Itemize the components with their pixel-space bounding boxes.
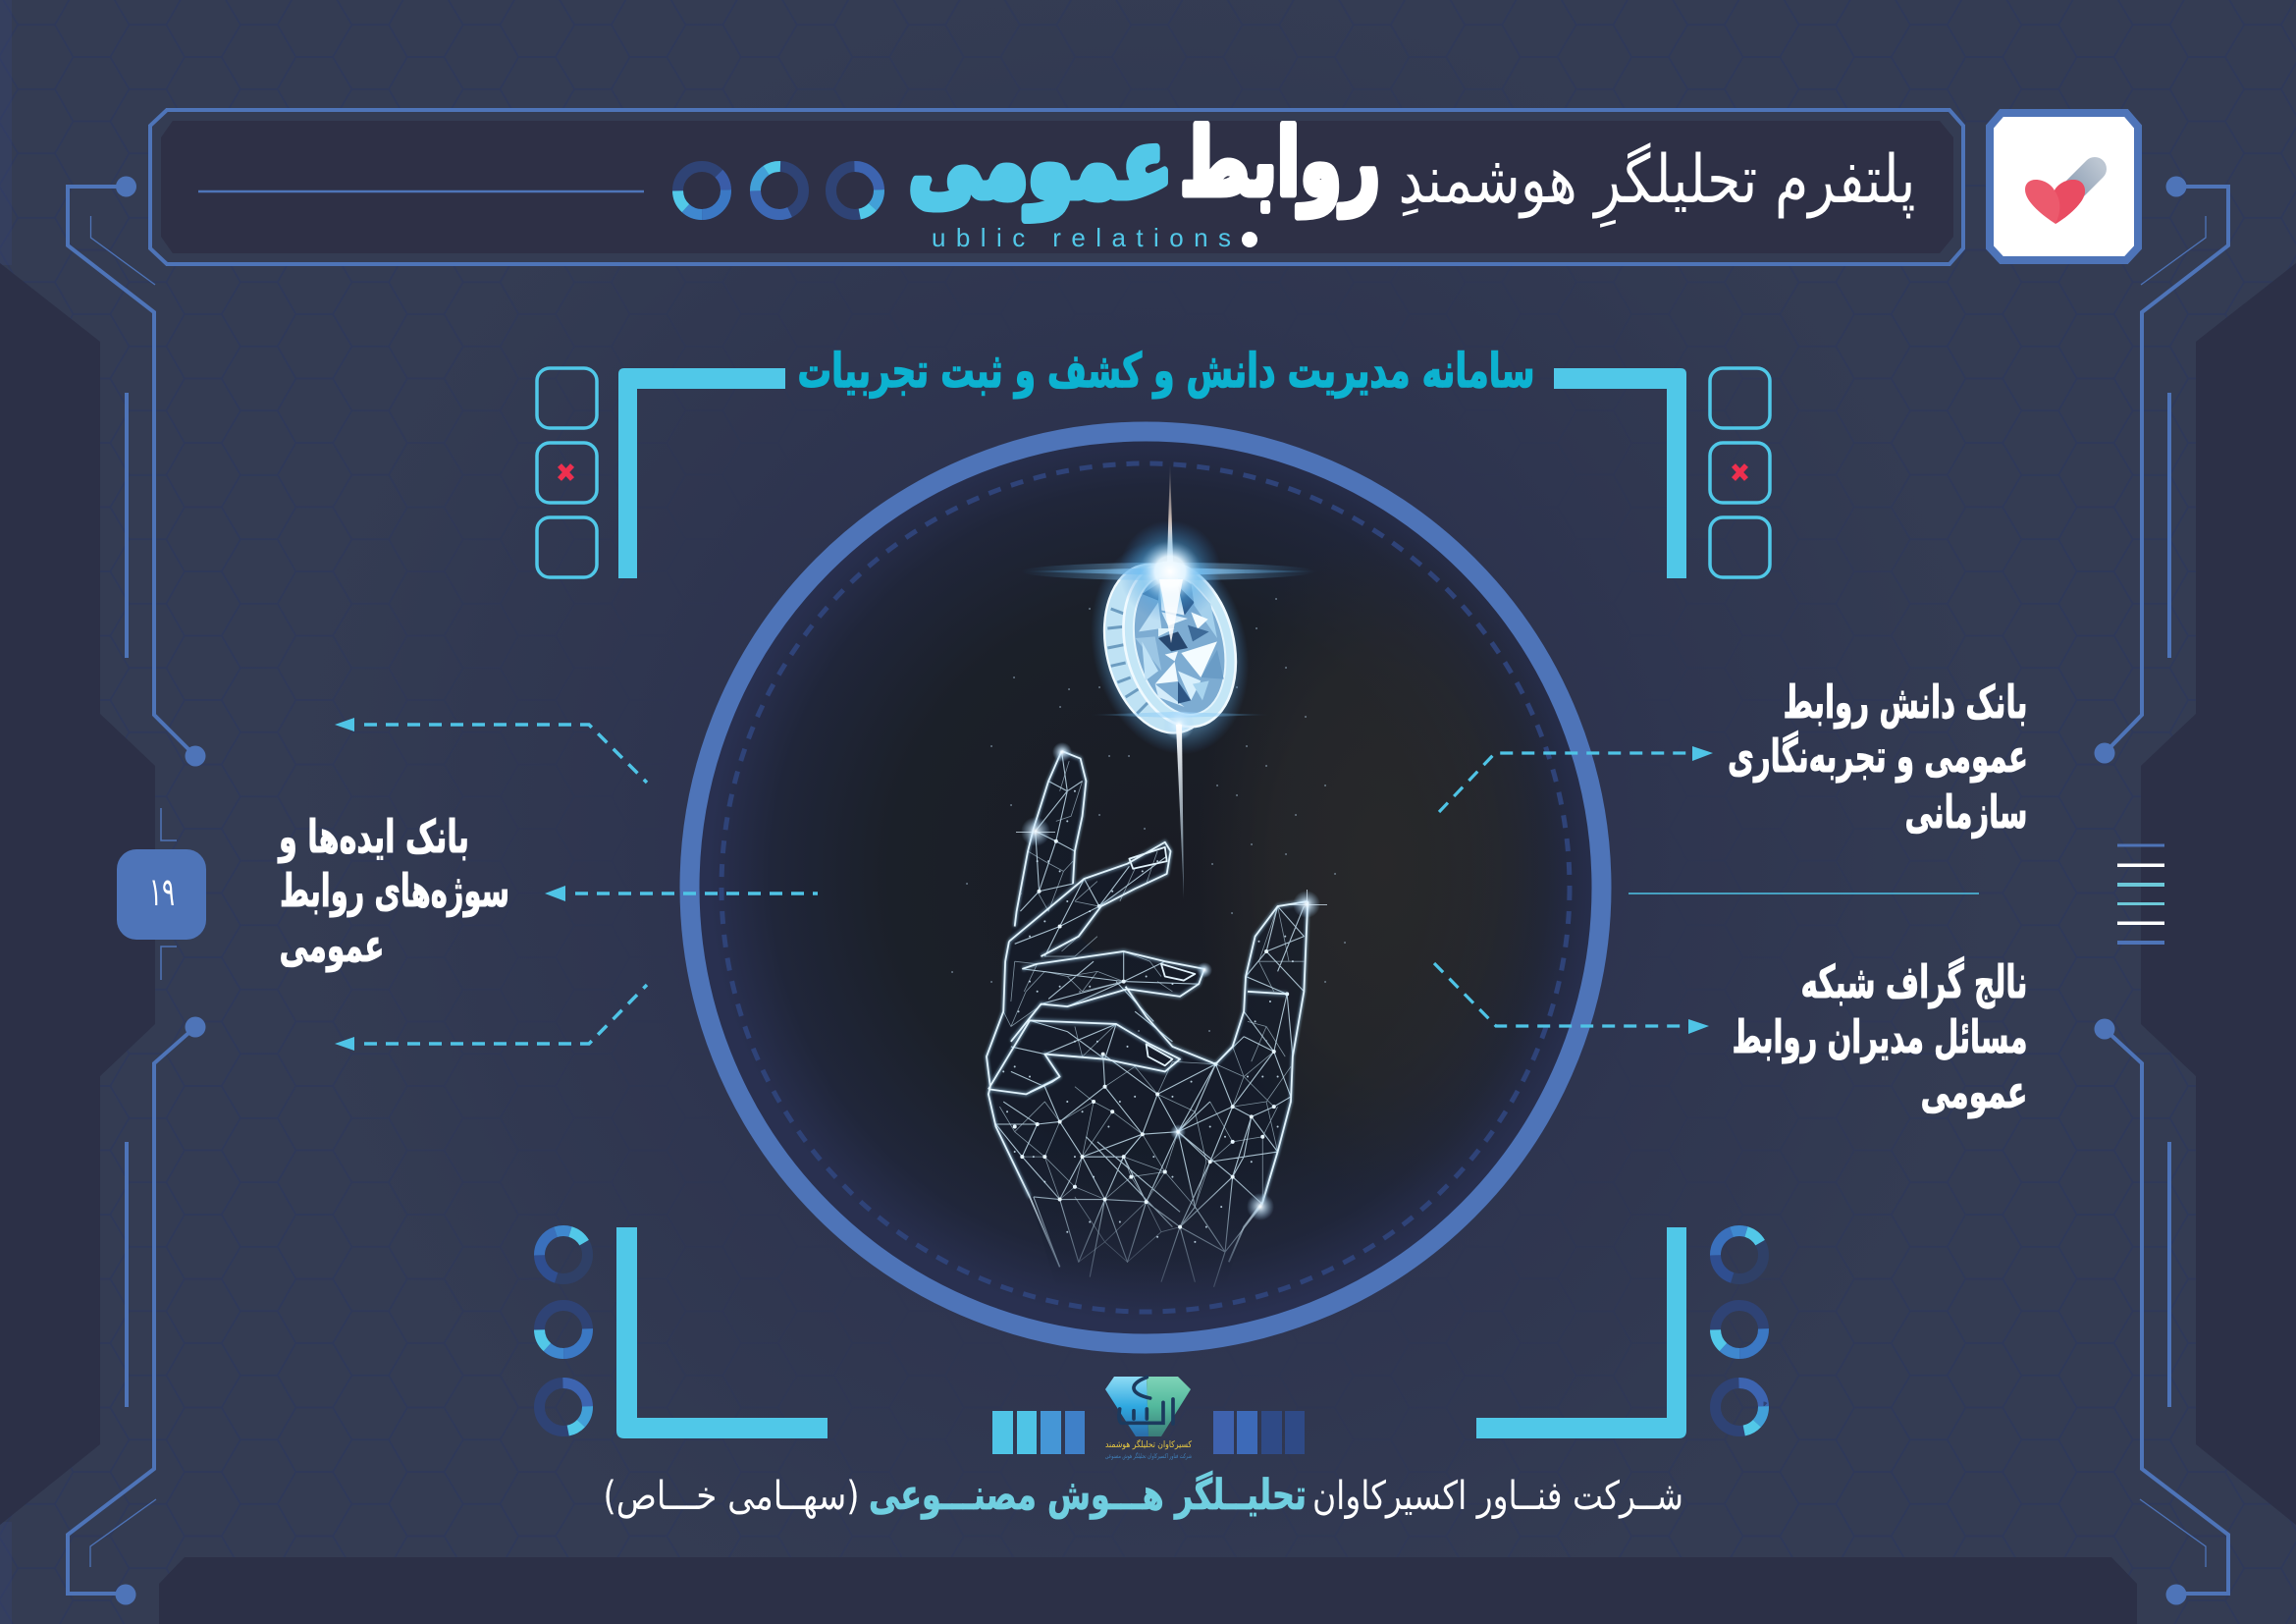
bars: right of logo [1213,1411,1305,1454]
glow outline [987,751,1308,1202]
company logo: شرکت فناور اکسیرکاوان تحلیلگر هوش مصنوعی [1105,1452,1192,1460]
text: ideas bank: عمومی [279,919,385,972]
page number: ۱۹ [149,870,175,915]
rings: bottom right [1716,1231,1763,1432]
arrow: bottom right [1434,963,1709,1034]
text: ideas bank: بانک ایده‌ها و [278,810,469,863]
text: knowledge graph [1732,955,2028,1118]
hand fill [987,751,1308,1287]
text: knowledge graph: عمومی [1920,1065,2028,1118]
tiny specks on hand [1003,791,1293,1242]
crystal coin [1069,524,1270,772]
text: knowledge bank: عمومی و تجربه‌نگاری [1728,730,2028,783]
logotype: public relations (fa): عمومی [909,109,1172,220]
central circle [689,432,1602,1343]
footer: company name [603,1470,1683,1520]
circuit: bottom right [2095,1019,2228,1604]
company logo: کسیرکاوان تحلیلگر هوشمند [1105,1438,1193,1450]
hand [987,751,1308,1287]
company logo [1105,1377,1193,1460]
arrow: bottom left [335,985,647,1051]
arrow: middle left [545,886,818,901]
footer: company name: (سهــامی خـــاص) [603,1474,860,1519]
checkboxes: right [1710,368,1770,577]
header bar [150,109,1963,264]
arrow: top right [1439,746,1713,812]
icon: heart check [1990,113,2138,260]
page number [117,808,206,980]
text: knowledge bank: سازمانی [1904,785,2028,839]
stacked bars right [2117,844,2164,945]
text: ideas bank [278,810,509,972]
arrow: top left [335,718,647,783]
text: knowledge bank [1728,676,2028,839]
progress rings [677,167,880,214]
bright outline [987,751,1308,1267]
title: platform name: پلتفرم تحلیلگرِ هوشمندِ [1398,141,1916,229]
mesh lines [996,751,1304,1287]
sparkles [1016,742,1327,1220]
logotype: public relations (fa): روابط [1180,110,1380,217]
rings: bottom left [540,1231,587,1432]
logotype: latin subtitle: ublic relations [932,223,1231,252]
text: knowledge graph: مسائل مدیران روابط [1732,1010,2028,1063]
frame brackets [616,368,1686,1438]
circuit: bottom left [68,1017,206,1604]
illustration: crystal hand [952,461,1345,1287]
text: knowledge graph: نالج گراف شبکه [1800,955,2028,1008]
text: ideas bank: سوژه‌های روابط [280,864,509,917]
footer: company name: تحلیــلگر هـــوش مصنـــوعی [869,1470,1307,1520]
footer: company name: شــرکت فنــاور اکسیرکاوان [1312,1474,1683,1519]
circuit: top left [68,177,206,766]
checkboxes: left [537,368,597,577]
text: knowledge bank: بانک دانش روابط [1783,676,2028,729]
star dust [952,599,1345,1041]
node dots [1015,841,1287,1227]
fine mesh [999,761,1304,1262]
divider line right [1629,893,1979,894]
light flares [1021,461,1320,898]
circuit: top right [2095,177,2228,764]
bars: left of logo [992,1411,1085,1454]
heading: knowledge system: سامانه مدیریت دانش و کشف و ثبت تجربیات [797,344,1535,399]
